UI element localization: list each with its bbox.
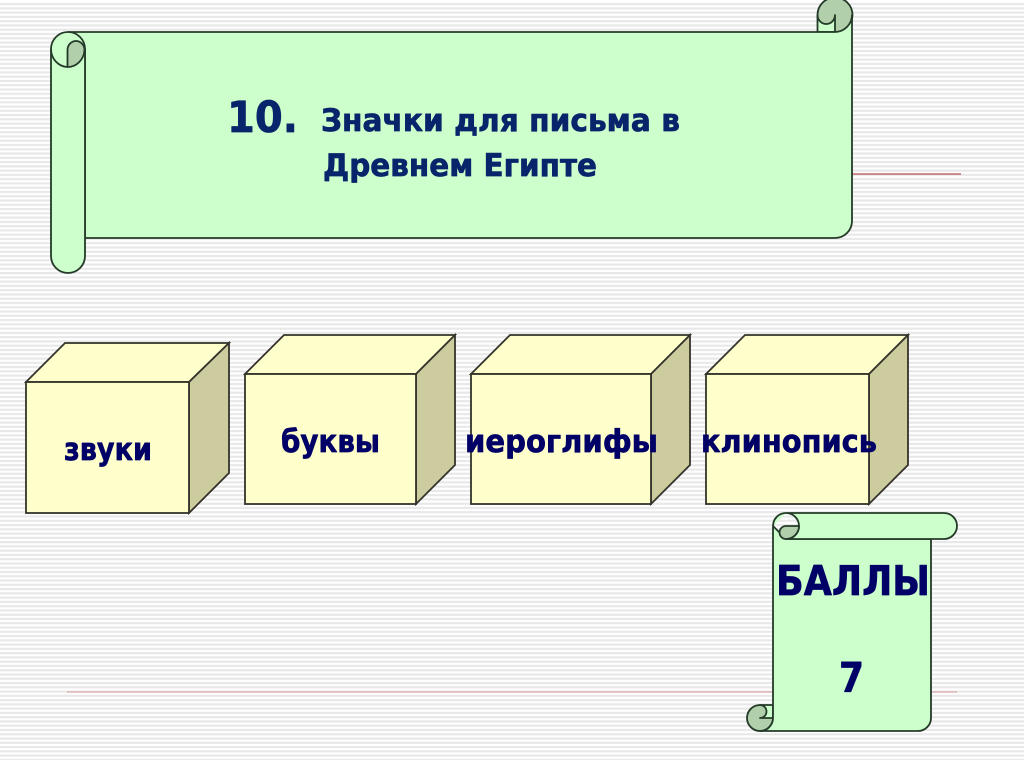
top roll	[773, 513, 957, 539]
title text: Значки для письма в	[321, 103, 680, 139]
title text: 10.	[227, 93, 298, 143]
score text: 7	[839, 654, 864, 702]
title text: Древнем Египте	[323, 148, 597, 184]
left roll	[51, 32, 85, 273]
score text: БАЛЛЫ	[776, 557, 930, 605]
score text	[776, 557, 930, 702]
answer box: клинопись: клинопись	[701, 424, 877, 460]
scroll body	[68, 15, 852, 238]
panel: score scroll	[747, 513, 957, 731]
answer box: клинопись	[701, 335, 908, 504]
answer box: иероглифы	[465, 335, 690, 504]
answer box: буквы: буквы	[281, 424, 380, 460]
scroll body	[760, 526, 931, 731]
top right roll	[818, 0, 852, 32]
answer box: буквы	[245, 335, 455, 504]
panel: title scroll	[51, 0, 852, 273]
bottom left curl	[747, 705, 773, 731]
answer box: иероглифы: иероглифы	[465, 424, 658, 460]
title text	[227, 93, 680, 184]
answer box: звуки	[26, 343, 229, 513]
answer box: звуки: звуки	[64, 432, 152, 468]
